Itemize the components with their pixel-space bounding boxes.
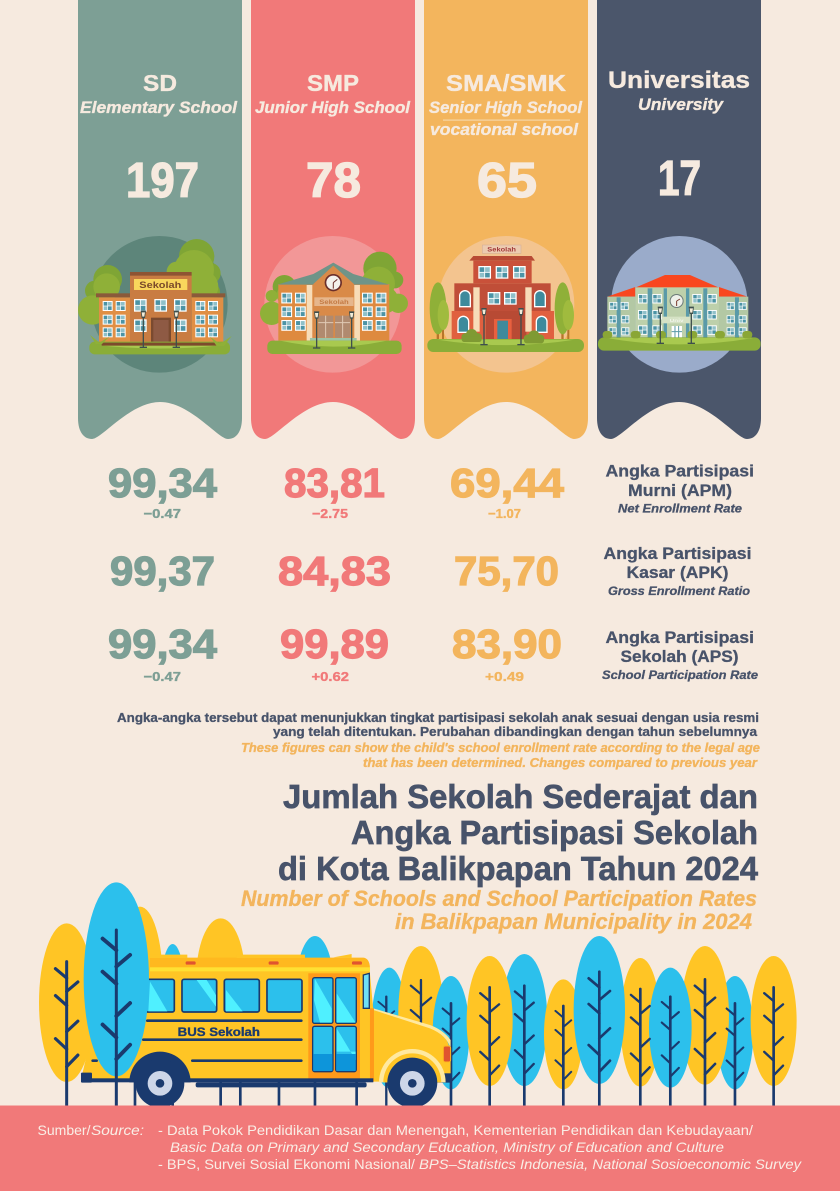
illustration: trees behind the bus	[117, 907, 444, 1107]
text block: sources: Source:	[91, 1122, 144, 1138]
illustration: right row of trees	[433, 936, 797, 1107]
row: Net Enrollment Rate: Net Enrollment Rate	[618, 502, 742, 516]
text block: explanatory note: These figures can show the child's school enrollment rate according to the legal age	[241, 741, 760, 755]
row: Gross Enrollment Ratio: 75,70	[454, 548, 559, 594]
subheading Elementary School: Elementary School	[80, 99, 237, 117]
subheading vocational school: vocational school	[430, 121, 578, 139]
bus headlight	[443, 1046, 451, 1062]
bus label: BUS Sekolah	[178, 1025, 260, 1039]
icon: junior high school building	[260, 236, 408, 373]
front wheel	[379, 1049, 446, 1108]
heading SD: SD	[143, 70, 177, 96]
row: School Participation Rate: 99,89	[280, 621, 389, 667]
table: participation rates	[108, 460, 758, 684]
row: Gross Enrollment Ratio: 99,37	[110, 548, 215, 594]
bus windows	[143, 979, 302, 1012]
row: Net Enrollment Rate: −1.07	[488, 506, 521, 521]
row: Net Enrollment Rate: 99,34	[108, 460, 217, 506]
row: Gross Enrollment Ratio	[110, 545, 752, 598]
panel: SMP column	[251, 0, 415, 439]
heading Universitas: Universitas	[608, 67, 750, 94]
title: Jumlah Sekolah Sederajat dan	[283, 778, 758, 815]
row: School Participation Rate: −0.47	[144, 669, 181, 684]
panel: Universitas column	[597, 0, 761, 439]
heading SMP: SMP	[307, 70, 359, 96]
text block: sources: BPS–Statistics Indonesia, National Sosioeconomic Survey	[419, 1156, 802, 1172]
ribbon SMA/SMK	[424, 0, 588, 439]
bus door	[308, 973, 360, 1080]
title	[278, 778, 759, 887]
row: School Participation Rate: 83,90	[452, 621, 562, 667]
row: Gross Enrollment Ratio: 84,83	[278, 548, 391, 594]
icon: elementary school building	[78, 236, 232, 373]
ribbon SD	[78, 0, 242, 439]
bus stripes	[93, 1021, 301, 1061]
panel: SMA/SMK column	[424, 0, 588, 439]
row: School Participation Rate: Sekolah (APS)	[620, 648, 738, 666]
bus body	[82, 960, 451, 1082]
title: Angka Partisipasi Sekolah	[351, 814, 758, 851]
row: Net Enrollment Rate: −2.75	[312, 506, 348, 521]
row: Net Enrollment Rate: 83,81	[284, 460, 385, 506]
rear wheel	[129, 1052, 191, 1108]
text block: sources: Sumber/	[38, 1122, 91, 1138]
row: Net Enrollment Rate: −0.47	[144, 506, 181, 521]
icon: senior high school building	[427, 236, 584, 373]
number of junior high schools: 78	[306, 154, 361, 208]
number of elementary schools: 197	[126, 154, 199, 208]
icon: university building: Univ	[670, 318, 684, 324]
subtitle: in Balikpapan Municipality in 2024	[395, 909, 752, 934]
text block: sources: - Data Pokok Pendidikan Dasar dan Menengah, Kementerian Pendidikan dan Kebudayaan/	[158, 1122, 753, 1138]
subtitle: Number of Schools and School Participation Rates	[241, 886, 757, 911]
text block: explanatory note	[117, 711, 760, 770]
row: School Participation Rate	[108, 621, 758, 684]
title: di Kota Balikpapan Tahun 2024	[278, 850, 759, 887]
icon: elementary school building: Sekolah	[139, 280, 182, 290]
text block: explanatory note: Angka-angka tersebut dapat menunjukkan tingkat partisipasi sekolah anak sesuai dengan usia resmi	[117, 711, 759, 725]
ribbon Universitas	[597, 0, 761, 439]
footer band	[0, 1106, 840, 1191]
tree trunks under the bus	[135, 1082, 357, 1107]
text block: explanatory note: yang telah ditentukan. Perubahan dibandingkan dengan tahun sebelumnya	[273, 725, 758, 739]
row: Gross Enrollment Ratio: Angka Partisipasi	[604, 545, 752, 563]
row: School Participation Rate: Angka Partisipasi	[606, 629, 754, 647]
illustration: school bus	[81, 954, 452, 1108]
icon: junior high school building: Sekolah	[319, 299, 349, 306]
subheading Junior High School: Junior High School	[255, 99, 410, 117]
row: School Participation Rate: 99,34	[108, 621, 217, 667]
row: School Participation Rate: +0.62	[312, 669, 349, 684]
row: Net Enrollment Rate: Angka Partisipasi	[606, 462, 754, 480]
text block: sources	[38, 1122, 802, 1172]
number of senior high schools: 65	[477, 154, 537, 208]
row: Gross Enrollment Ratio: Kasar (APK)	[626, 564, 728, 582]
row: Gross Enrollment Ratio: Gross Enrollment Ratio	[608, 584, 750, 598]
text block: explanatory note: that has been determined. Changes compared to previous year	[363, 756, 758, 770]
illustration: left trees in front of the bus	[39, 882, 149, 1107]
row: School Participation Rate: +0.49	[485, 669, 524, 684]
bumper	[81, 1073, 452, 1087]
subheading University: University	[638, 96, 724, 114]
subheading Senior High School: Senior High School	[429, 99, 582, 117]
row: Net Enrollment Rate: 69,44	[450, 460, 564, 506]
text block: sources: - BPS, Survei Sosial Ekonomi Nasional/	[158, 1156, 415, 1172]
heading SMA/SMK: SMA/SMK	[446, 70, 566, 96]
icon: university building	[598, 236, 761, 373]
row: Net Enrollment Rate: Murni (APM)	[628, 482, 732, 500]
subtitle	[241, 886, 757, 934]
panel: SD column	[78, 0, 242, 439]
row: School Participation Rate: School Participation Rate	[602, 668, 758, 682]
icon: senior high school building: Sekolah	[487, 247, 516, 254]
text block: sources: Basic Data on Primary and Secondary Education, Ministry of Education and Culture	[170, 1139, 724, 1155]
row: Net Enrollment Rate	[108, 460, 754, 521]
number of universities: 17	[658, 152, 701, 206]
ribbon SMP	[251, 0, 415, 439]
